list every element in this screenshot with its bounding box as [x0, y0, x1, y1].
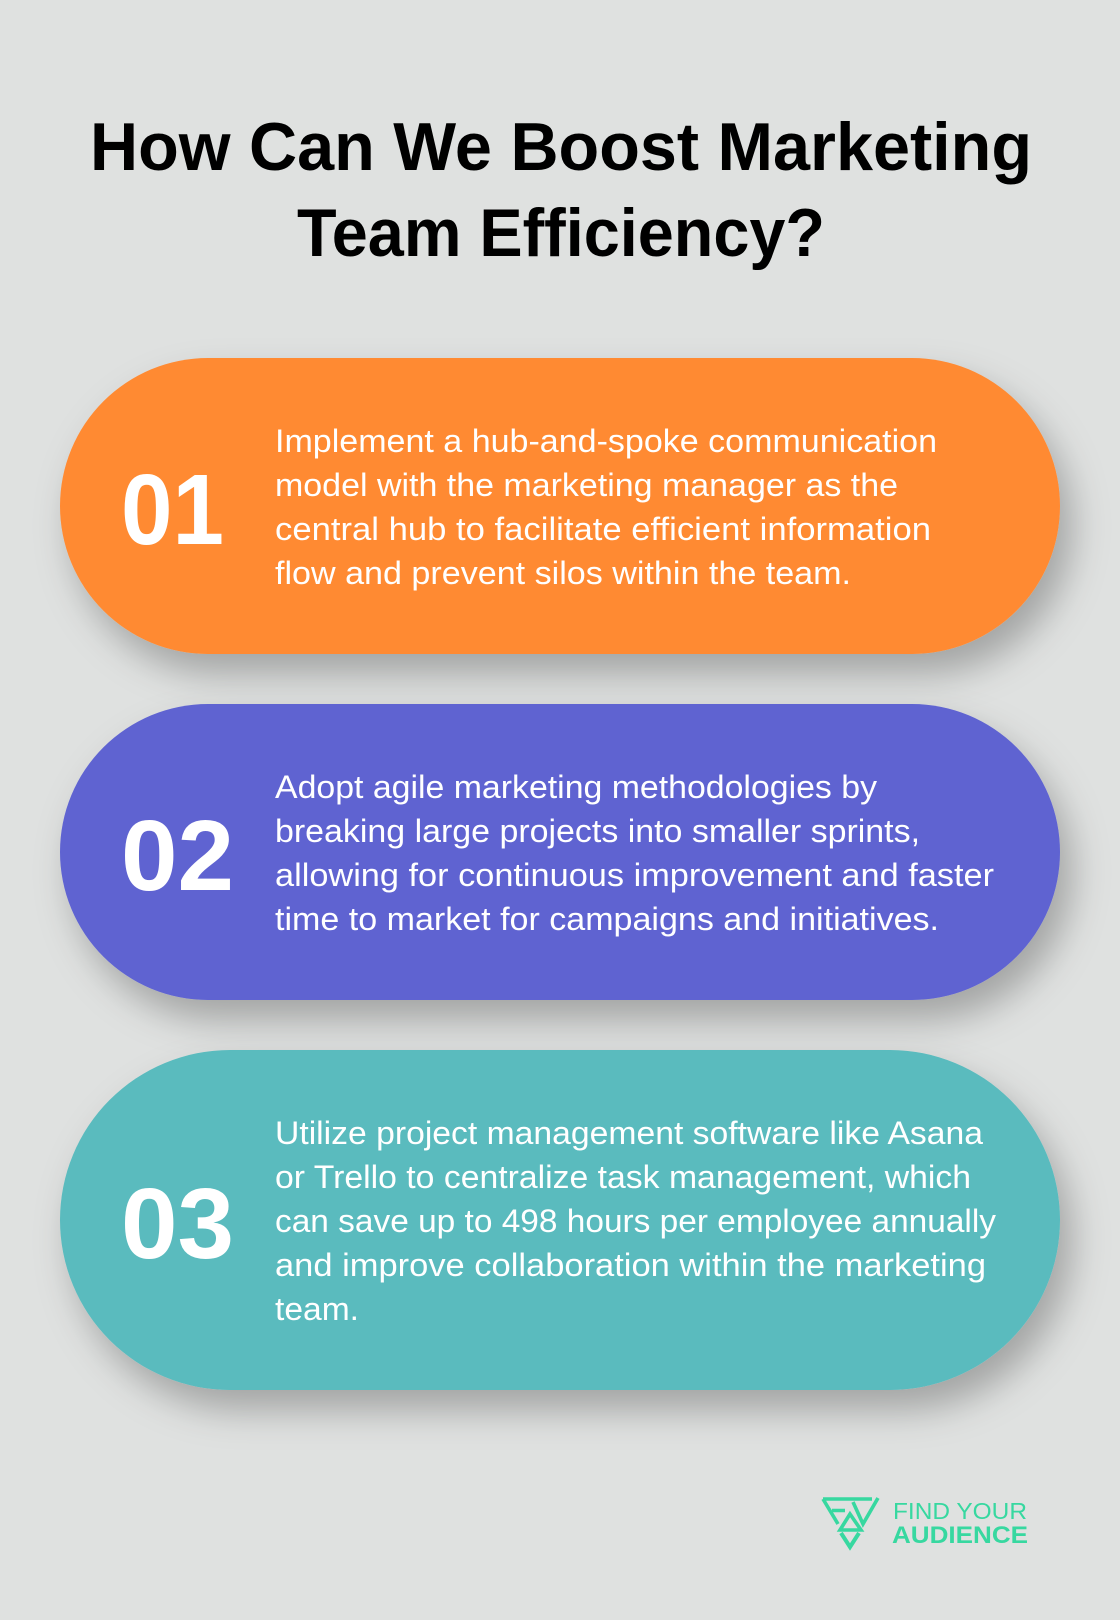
text: step 01: flow and prevent silos within the team.: [275, 555, 851, 591]
logo: Find Your Audience: [823, 1498, 1028, 1549]
text: step 02: allowing for continuous improvement and faster: [275, 857, 994, 893]
panel: step 02: [60, 704, 1060, 1000]
text: step 03: or Trello to centralize task management, which: [275, 1159, 971, 1195]
text: step 03: can save up to 498 hours per employee annually: [275, 1203, 996, 1239]
text: step 02: breaking large projects into smaller sprints,: [275, 813, 920, 849]
wordmark: FIND YOUR: [893, 1498, 1027, 1524]
number 03: 03: [121, 1168, 234, 1280]
text: step 03: Utilize project management software like Asana: [275, 1115, 983, 1151]
text: step 03: [275, 1115, 996, 1327]
text: step 01: Implement a hub-and-spoke communication: [275, 423, 937, 459]
text: step 01: model with the marketing manager as the: [275, 467, 898, 503]
text: step 01: [275, 423, 937, 591]
number 02: 02: [121, 800, 234, 912]
panel: step 03: [60, 1050, 1060, 1390]
text: step 02: [275, 769, 994, 937]
pill: purple: [60, 704, 1060, 1000]
pill: orange: [60, 358, 1060, 654]
pill: teal: [60, 1050, 1060, 1390]
icon: triangle mark: [823, 1498, 878, 1547]
text: step 02: time to market for campaigns and initiatives.: [275, 901, 939, 937]
number 01: 01: [121, 454, 224, 566]
wordmark: [892, 1498, 1028, 1549]
title: Team Efficiency?: [297, 195, 825, 271]
text: step 03: and improve collaboration within the marketing: [275, 1247, 986, 1283]
title: [90, 109, 1032, 271]
text: step 03: team.: [275, 1291, 359, 1327]
wordmark: AUDIENCE: [892, 1522, 1028, 1549]
panel: step 01: [60, 358, 1060, 654]
text: step 02: Adopt agile marketing methodologies by: [275, 769, 877, 805]
title: How Can We Boost Marketing: [90, 109, 1032, 185]
text: step 01: central hub to facilitate efficient information: [275, 511, 931, 547]
